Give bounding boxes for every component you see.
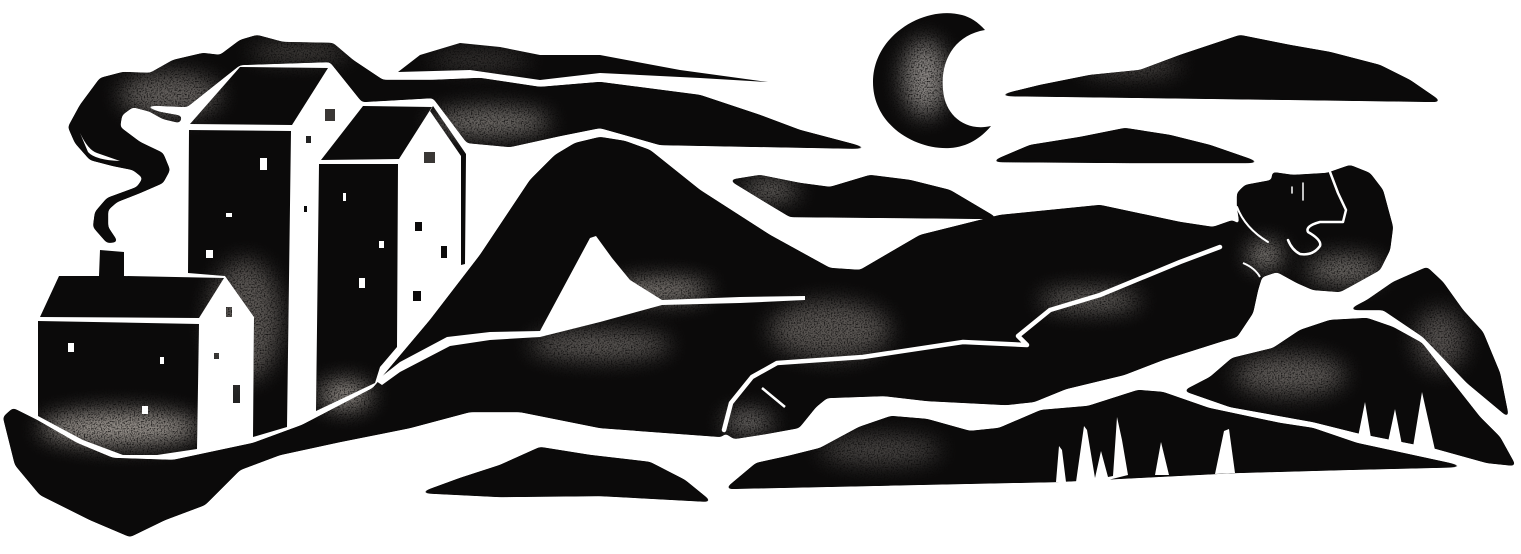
white line: shoulder bbox=[1243, 263, 1260, 277]
cloud: upper right bbox=[995, 35, 1442, 102]
hill: lower long hill bbox=[725, 390, 1468, 489]
hill: far right mountain bbox=[1348, 267, 1509, 418]
white line: finger bbox=[762, 388, 785, 407]
house: small front house with chimney bbox=[38, 250, 240, 455]
white lines: knee gap and thigh line bbox=[376, 236, 805, 385]
cloud: behind the knee bbox=[729, 175, 999, 219]
cloud: middle right bbox=[990, 128, 1262, 163]
trees: right large hill bbox=[1358, 392, 1435, 450]
face: jaw, hairline and ear lines bbox=[1237, 172, 1346, 254]
smoke and cloud behind the houses bbox=[68, 35, 872, 243]
hill: lower centre bbox=[419, 447, 712, 502]
trees: lower long hill bbox=[1056, 417, 1235, 482]
windows: small house bbox=[68, 307, 240, 414]
windows: middle building bbox=[206, 109, 335, 258]
watercolor wash bbox=[40, 40, 1465, 464]
windows: right building bbox=[343, 152, 447, 301]
white lines: arm contour bbox=[724, 247, 1220, 430]
cloud: upper thin strip bbox=[398, 43, 768, 82]
moon: crescent bbox=[873, 13, 991, 148]
hill: right large hill bbox=[1183, 318, 1516, 466]
eyes bbox=[1292, 183, 1303, 200]
reclining figure: body silhouette bbox=[3, 137, 1393, 537]
house: tall middle building bbox=[188, 67, 335, 437]
house: right building bbox=[316, 106, 466, 411]
